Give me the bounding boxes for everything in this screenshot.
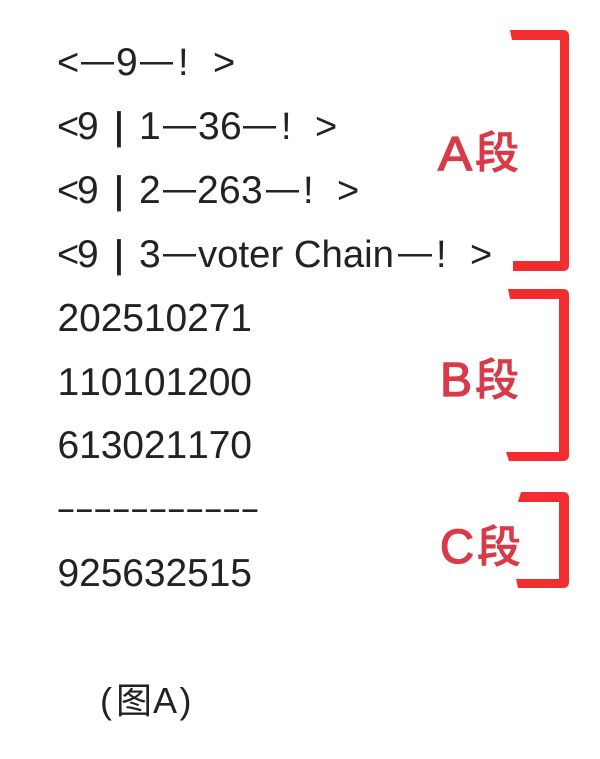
- code line 1: —: [140, 40, 173, 82]
- code line 2: —: [163, 104, 196, 146]
- caption (图A): (: [100, 680, 112, 721]
- code line 2: —: [243, 104, 276, 146]
- code line 4: [57, 232, 492, 276]
- code line 3: 2: [139, 169, 161, 212]
- code line 3: |: [114, 170, 124, 212]
- code line 4: 9: [77, 233, 99, 276]
- code line 3: 9: [77, 169, 99, 212]
- label B段: B: [440, 354, 472, 407]
- code line 4: —: [163, 232, 196, 274]
- code line 4: !: [436, 234, 447, 276]
- number line 202510271: 202510271: [58, 297, 252, 340]
- code line 2: |: [114, 106, 124, 148]
- code line 2: 9: [77, 105, 99, 148]
- code line 4: 3: [139, 233, 161, 276]
- code line 4: |: [114, 234, 124, 276]
- code line 2: [57, 104, 337, 148]
- code line 3: >: [337, 170, 359, 212]
- code line 2: >: [315, 106, 337, 148]
- label A段: A: [438, 128, 472, 181]
- bracket B: [506, 289, 569, 461]
- code line 4: >: [470, 234, 492, 276]
- code line 3: [57, 168, 359, 212]
- number line 613021170: 613021170: [58, 424, 252, 467]
- code line 1: <: [57, 42, 79, 84]
- bracket C: [516, 492, 569, 588]
- number line 925632515: 925632515: [58, 552, 252, 595]
- number line 110101200: 110101200: [58, 361, 252, 404]
- code line 3: !: [303, 170, 314, 212]
- label A段: [438, 117, 519, 181]
- caption (图A): [100, 672, 192, 724]
- label B段: [440, 344, 519, 408]
- code line 2: 36: [198, 105, 242, 148]
- label C段: C: [440, 521, 474, 574]
- code line 1: —: [81, 40, 114, 82]
- code line 2: 1: [139, 105, 161, 148]
- code line 1: >: [213, 42, 235, 84]
- code line 2: <: [57, 106, 79, 148]
- code line 1: !: [178, 42, 189, 84]
- caption (图A): A: [153, 680, 177, 721]
- code line 4: voter Chain: [198, 234, 394, 276]
- dashed separator line: –––––––––––: [59, 495, 257, 523]
- code line 1: [57, 40, 235, 84]
- code line 4: —: [398, 232, 432, 274]
- label C段: [440, 511, 521, 575]
- code line 4: <: [57, 234, 79, 276]
- caption (图A): 图: [116, 672, 152, 724]
- code line 3: <: [57, 170, 79, 212]
- bracket A: [510, 30, 569, 271]
- code line 3: 263: [197, 169, 263, 212]
- code line 3: —: [163, 168, 196, 210]
- code line 2: !: [281, 106, 292, 148]
- code line 1: 9: [116, 41, 138, 84]
- label B段: 段: [475, 344, 519, 408]
- code line 3: —: [266, 168, 299, 210]
- label A段: 段: [475, 117, 519, 181]
- label C段: 段: [477, 511, 521, 575]
- caption (图A): ): [180, 680, 192, 721]
